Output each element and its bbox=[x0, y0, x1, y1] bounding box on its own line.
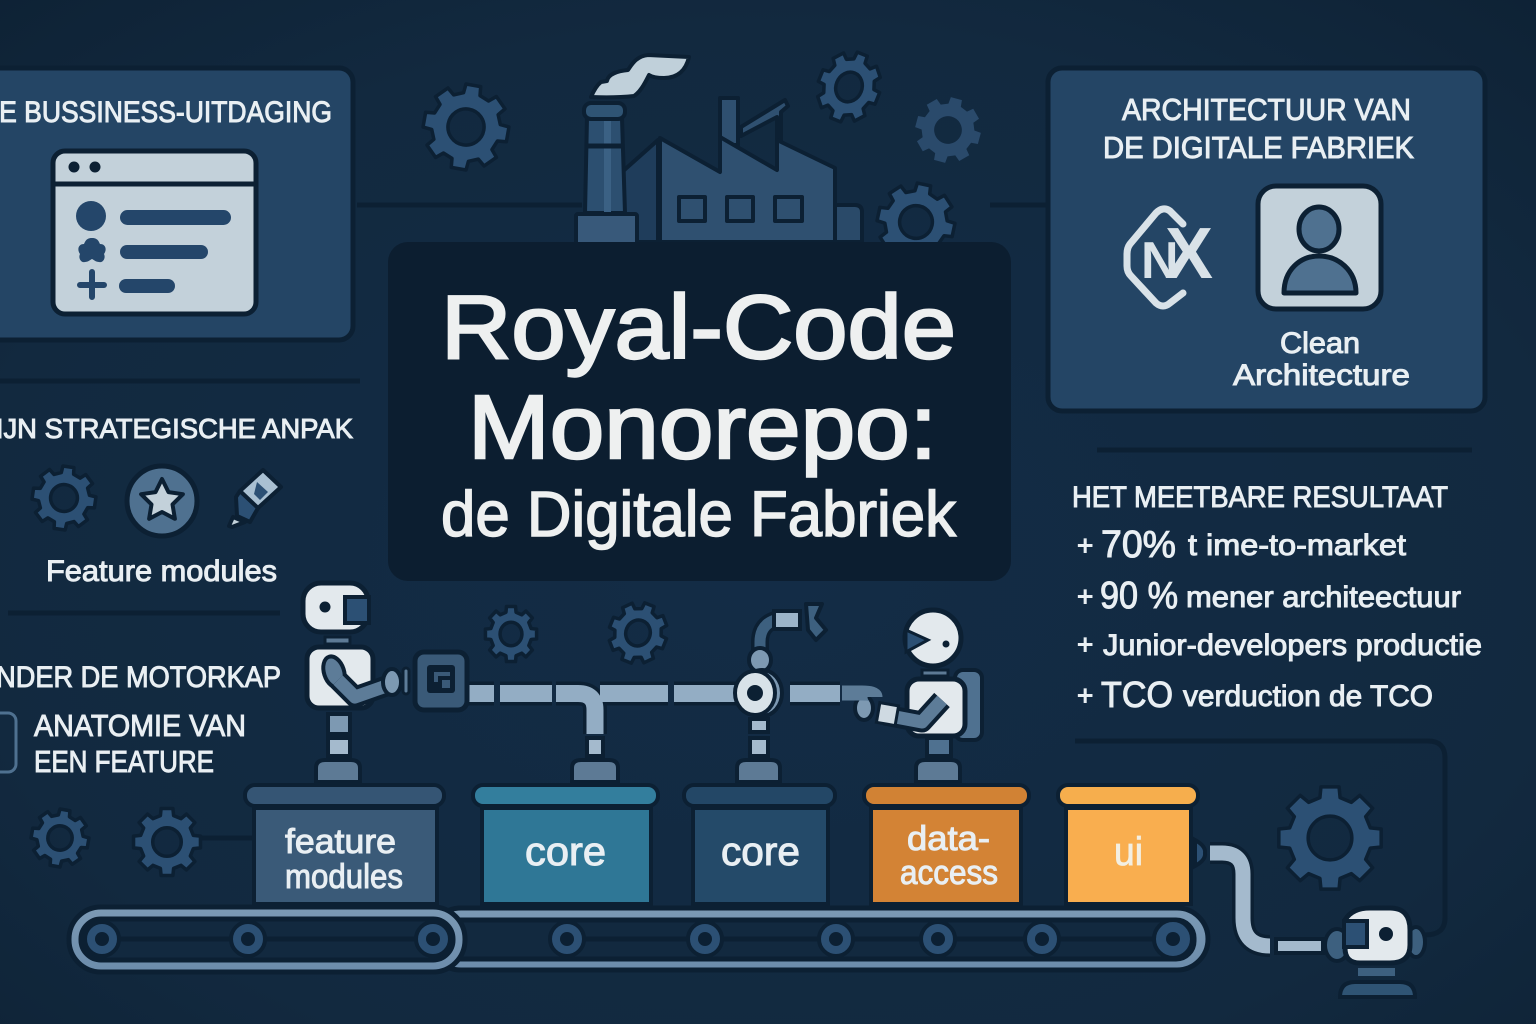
label: clean architecture: Clean bbox=[1280, 327, 1360, 360]
factory rear wing bbox=[622, 140, 658, 242]
label: clean architecture bbox=[1233, 327, 1410, 392]
module: feature modules: feature bbox=[285, 823, 396, 861]
shoulder bbox=[320, 654, 348, 690]
leg bbox=[328, 714, 350, 734]
title block bbox=[388, 242, 1011, 581]
result: cleaner architecture: + bbox=[1077, 581, 1093, 612]
conveyor belt bbox=[69, 907, 1208, 972]
result: TCO: TCO bbox=[1101, 674, 1173, 715]
head bbox=[303, 583, 368, 632]
right block bbox=[835, 205, 862, 242]
section: strategic approach bbox=[0, 413, 353, 588]
heading: measurable result: HET MEETBARE RESULTAAT bbox=[1072, 481, 1448, 514]
torso bbox=[907, 679, 965, 736]
decorative gears bbox=[27, 43, 1381, 889]
pipe: drops bbox=[587, 719, 768, 756]
belt: long section bbox=[430, 908, 1208, 970]
module: feature modules: modules bbox=[285, 858, 403, 896]
title: de Digitale Fabriek bbox=[441, 478, 957, 550]
heading: architecture: DE DIGITALE FABRIEK bbox=[1103, 130, 1414, 165]
module: core navy bbox=[684, 785, 835, 904]
pipe: main run bbox=[468, 694, 840, 734]
label: clean architecture: Architecture bbox=[1233, 359, 1410, 392]
result: junior developers: Junior-developers productie bbox=[1103, 629, 1482, 662]
label: feature modules: Feature modules bbox=[46, 555, 277, 588]
wheels bbox=[85, 920, 1192, 958]
result: time to market: + bbox=[1077, 530, 1093, 561]
robot: right bbox=[842, 610, 982, 782]
output pipe and robot bbox=[1195, 840, 1425, 997]
factory hall bbox=[660, 137, 835, 242]
heading: architecture bbox=[1103, 92, 1414, 165]
factory bbox=[576, 55, 862, 244]
icon: feature frame bbox=[0, 713, 16, 772]
result: junior developers: + bbox=[1077, 629, 1093, 660]
icon: pen bbox=[229, 470, 281, 527]
valve bbox=[735, 670, 782, 716]
leg bbox=[927, 738, 951, 756]
result: cleaner architecture: mener architeectuur bbox=[1186, 581, 1461, 614]
belt: pulley section bbox=[69, 907, 465, 972]
section: under the hood bbox=[0, 661, 281, 779]
result: cleaner architecture: 90 % bbox=[1100, 575, 1178, 617]
connector lines bbox=[0, 205, 1472, 935]
module: data-access: data- bbox=[907, 820, 990, 858]
backpack bbox=[955, 670, 982, 740]
title: Royal-Code bbox=[441, 278, 956, 378]
module: data-access: access bbox=[900, 854, 998, 892]
icon: browser window bbox=[53, 151, 256, 314]
panel: architecture bbox=[1048, 68, 1485, 411]
result: time to market: t ime-to-market bbox=[1188, 529, 1407, 562]
module: core teal: core bbox=[525, 830, 606, 874]
section: measurable result bbox=[1072, 481, 1482, 715]
windows bbox=[679, 197, 802, 221]
arm bbox=[338, 680, 392, 697]
module: ui: ui bbox=[1114, 830, 1143, 874]
arm elbow pipe bbox=[842, 693, 875, 697]
control box bbox=[415, 652, 467, 710]
robot: left bbox=[303, 583, 409, 782]
small chimney and duct bbox=[720, 98, 738, 145]
text: feature anatomy: EEN FEATURE bbox=[34, 744, 214, 779]
result: TCO: verduction de TCO bbox=[1183, 680, 1433, 713]
pipes bbox=[415, 604, 840, 782]
robot head bbox=[1325, 929, 1349, 961]
pipe bases bbox=[572, 760, 780, 782]
text: feature anatomy: ANATOMIE VAN bbox=[34, 708, 246, 743]
module: ui bbox=[1058, 785, 1198, 904]
title: Monorepo: bbox=[468, 378, 937, 478]
arm bbox=[885, 700, 942, 722]
chimney bbox=[585, 118, 625, 213]
head bbox=[905, 610, 961, 666]
result: time to market bbox=[1077, 524, 1407, 566]
text: feature anatomy bbox=[34, 708, 246, 779]
icon: Nx logo: N bbox=[1141, 232, 1179, 290]
icon: clean architecture card bbox=[1258, 186, 1381, 309]
torso bbox=[307, 647, 373, 708]
module: data-access bbox=[864, 785, 1029, 904]
panel: business challenge bbox=[0, 68, 353, 340]
title bbox=[441, 278, 957, 550]
output pipe bbox=[1195, 840, 1205, 866]
result: time to market: 70% bbox=[1101, 524, 1176, 566]
result: TCO: + bbox=[1077, 680, 1093, 711]
module: core navy: core bbox=[721, 830, 800, 874]
icon: Nx logo: X bbox=[1165, 214, 1213, 294]
module: core teal bbox=[473, 785, 658, 904]
valve arm bbox=[749, 604, 826, 672]
module: feature modules bbox=[245, 785, 444, 904]
result: TCO bbox=[1077, 674, 1433, 715]
icon: Nx logo bbox=[1127, 209, 1213, 306]
result: cleaner architecture bbox=[1077, 575, 1461, 617]
heading: architecture: ARCHITECTUUR VAN bbox=[1122, 92, 1411, 127]
icon: star badge bbox=[127, 466, 197, 536]
smoke bbox=[591, 55, 689, 97]
